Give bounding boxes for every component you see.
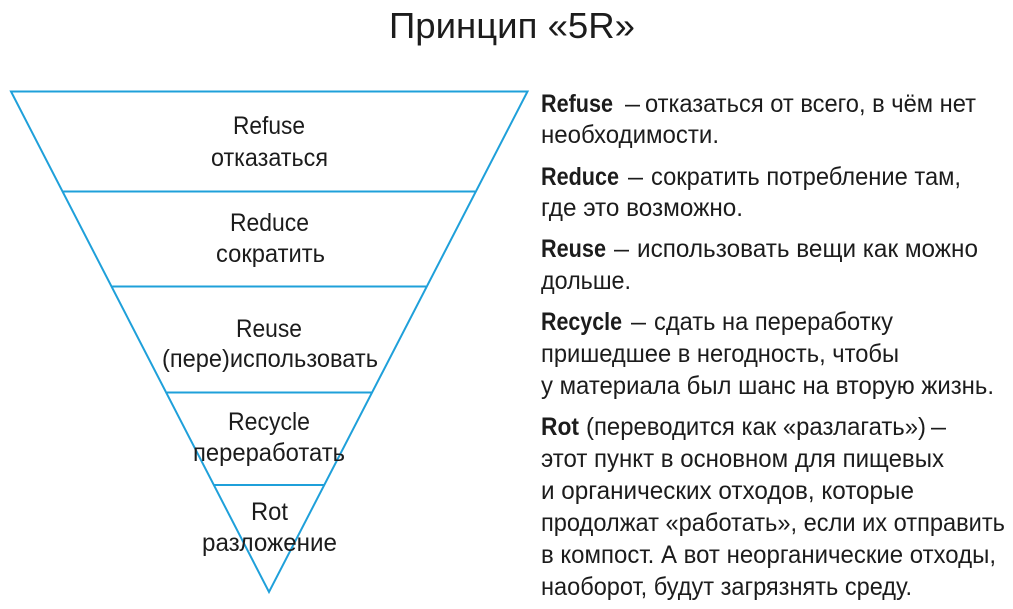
text block: Reduce bbox=[541, 163, 961, 222]
pyramid label: Refuse: отказаться bbox=[211, 144, 328, 172]
title: Принцип «5R» bbox=[389, 5, 635, 46]
text block: Refuse: отказаться от всего, в чём нет bbox=[645, 90, 977, 118]
text block: Reduce: где это возможно. bbox=[541, 194, 743, 222]
text block: Reduce: Reduce bbox=[541, 163, 619, 191]
text block: Recycle: — bbox=[631, 308, 646, 336]
pyramid label: Refuse: Refuse bbox=[233, 112, 305, 140]
text block: Reuse: использовать вещи как можно bbox=[637, 235, 978, 263]
text block: Refuse: необходимости. bbox=[541, 121, 719, 149]
pyramid label: Reuse: Reuse bbox=[236, 315, 302, 343]
text block: Reuse: Reuse bbox=[541, 235, 606, 263]
pyramid label: Reduce bbox=[216, 209, 325, 268]
text block: Rot: этот пункт в основном для пищевых bbox=[541, 445, 944, 473]
text block: Rot bbox=[541, 413, 1005, 601]
text block: Rot: наоборот, будут загрязнять среду. bbox=[541, 573, 912, 601]
text block: Refuse: Refuse bbox=[541, 90, 613, 118]
pyramid label: Reduce: Reduce bbox=[230, 209, 309, 237]
text block: Recycle bbox=[541, 308, 994, 400]
text block: Rot: — bbox=[931, 413, 946, 441]
pyramid label: Rot: разложение bbox=[202, 529, 337, 557]
text block: Reduce: сократить потребление там, bbox=[651, 163, 961, 191]
text block: Rot: в компост. А вот неорганические отходы, bbox=[541, 541, 996, 569]
text block: Recycle: сдать на переработку bbox=[654, 308, 893, 336]
pyramid label: Reuse: (пере)использовать bbox=[162, 345, 378, 373]
text block: Recycle: Recycle bbox=[541, 308, 622, 336]
pyramid label: Reuse bbox=[162, 315, 378, 373]
inverted pyramid diagram bbox=[11, 92, 528, 592]
text block: Reuse: — bbox=[614, 235, 629, 263]
pyramid label: Recycle: переработать bbox=[193, 439, 345, 467]
text block: Rot: и органических отходов, которые bbox=[541, 477, 914, 505]
text block: Refuse: — bbox=[625, 90, 640, 118]
pyramid label: Refuse bbox=[211, 112, 328, 172]
pyramid label: Recycle bbox=[193, 408, 345, 467]
pyramid label: Rot: Rot bbox=[251, 498, 288, 526]
text block: Recycle: пришедшее в негодность, чтобы bbox=[541, 340, 899, 368]
text block: Rot: (переводится как «разлагать») bbox=[586, 413, 926, 441]
text block: Refuse bbox=[541, 90, 977, 149]
pyramid label: Reduce: сократить bbox=[216, 240, 325, 268]
pyramid label: Recycle: Recycle bbox=[228, 408, 310, 436]
text block: Rot: Rot bbox=[541, 413, 580, 441]
text block: Recycle: у материала был шанс на вторую жизнь. bbox=[541, 372, 994, 400]
text block: Reuse: дольше. bbox=[541, 267, 631, 295]
pyramid label: Rot bbox=[202, 498, 337, 557]
text block: Reuse bbox=[541, 235, 978, 295]
text block: Reduce: — bbox=[628, 163, 643, 191]
